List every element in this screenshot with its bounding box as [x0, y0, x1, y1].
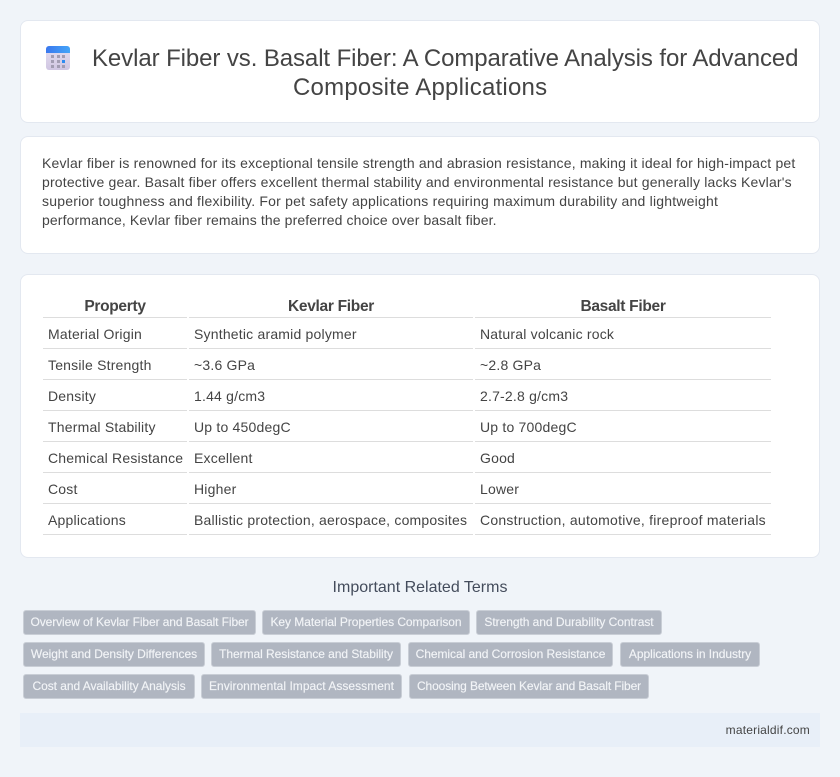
- related term tags: Thermal Resistance and Stability: [219, 647, 393, 661]
- title: Kevlar Fiber vs. Basalt Fiber: A Comparative Analysis for Advanced: [92, 45, 798, 72]
- related term tags: Key Material Properties Comparison: [270, 615, 462, 629]
- comparison table: Good: [480, 450, 515, 466]
- comparison table: 1.44 g/cm3: [194, 388, 265, 404]
- comparison table panel: [20, 274, 820, 558]
- related term tags: Chemical and Corrosion Resistance: [416, 647, 605, 661]
- intro text: protective gear. Basalt fiber offers excellent thermal stability and environmental resistance but generally lacks Kevlar's: [42, 174, 792, 190]
- intro text: superior toughness and flexibility. For pet safety applications requiring maximum durability and lightweight: [42, 193, 718, 209]
- related term tags: Applications in Industry: [629, 647, 751, 661]
- related term tags: Choosing Between Kevlar and Basalt Fiber: [417, 679, 641, 693]
- comparison table: Construction, automotive, fireproof materials: [480, 512, 766, 528]
- related term tags: [23, 610, 760, 699]
- comparison table: Cost: [48, 481, 78, 497]
- comparison table: Material Origin: [48, 326, 142, 342]
- related term tags: Overview of Kevlar Fiber and Basalt Fiber: [30, 615, 248, 629]
- comparison table: Ballistic protection, aerospace, composites: [194, 512, 467, 528]
- comparison table: Thermal Stability: [48, 419, 156, 435]
- comparison table: ~3.6 GPa: [194, 357, 255, 373]
- comparison table: Density: [48, 388, 96, 404]
- related term tags: Cost and Availability Analysis: [32, 679, 186, 693]
- comparison table: Synthetic aramid polymer: [194, 326, 357, 342]
- intro text: Kevlar fiber is renowned for its exceptional tensile strength and abrasion resistance, making it ideal for high-impact pet: [42, 155, 795, 171]
- comparison table: Excellent: [194, 450, 253, 466]
- comparison table: Chemical Resistance: [48, 450, 183, 466]
- related term tags: Strength and Durability Contrast: [484, 615, 654, 629]
- footer source: materialdif.com: [726, 723, 810, 737]
- icon: calendar: [46, 46, 70, 70]
- related term tags: Environmental Impact Assessment: [209, 679, 394, 693]
- comparison table: [43, 298, 771, 535]
- related term tags: Weight and Density Differences: [31, 647, 197, 661]
- comparison table: Tensile Strength: [48, 357, 152, 373]
- related terms heading: Important Related Terms: [333, 579, 507, 596]
- comparison table: Up to 450degC: [194, 419, 291, 435]
- comparison table: Up to 700degC: [480, 419, 577, 435]
- intro panel: [20, 136, 820, 254]
- comparison table: ~2.8 GPa: [480, 357, 541, 373]
- footer bar: [20, 713, 820, 747]
- comparison table: 2.7-2.8 g/cm3: [480, 388, 568, 404]
- comparison table: Applications: [48, 512, 126, 528]
- comparison table: Higher: [194, 481, 236, 497]
- header card: [20, 20, 820, 123]
- comparison table: Basalt Fiber: [580, 298, 666, 315]
- comparison table: Natural volcanic rock: [480, 326, 614, 342]
- comparison table: Kevlar Fiber: [288, 298, 374, 315]
- comparison table: Lower: [480, 481, 519, 497]
- intro text: [42, 155, 796, 228]
- intro text: performance, Kevlar fiber remains the preferred choice over basalt fiber.: [42, 212, 497, 228]
- comparison table: Property: [84, 298, 146, 315]
- title: [92, 45, 798, 101]
- title: Composite Applications: [293, 74, 547, 101]
